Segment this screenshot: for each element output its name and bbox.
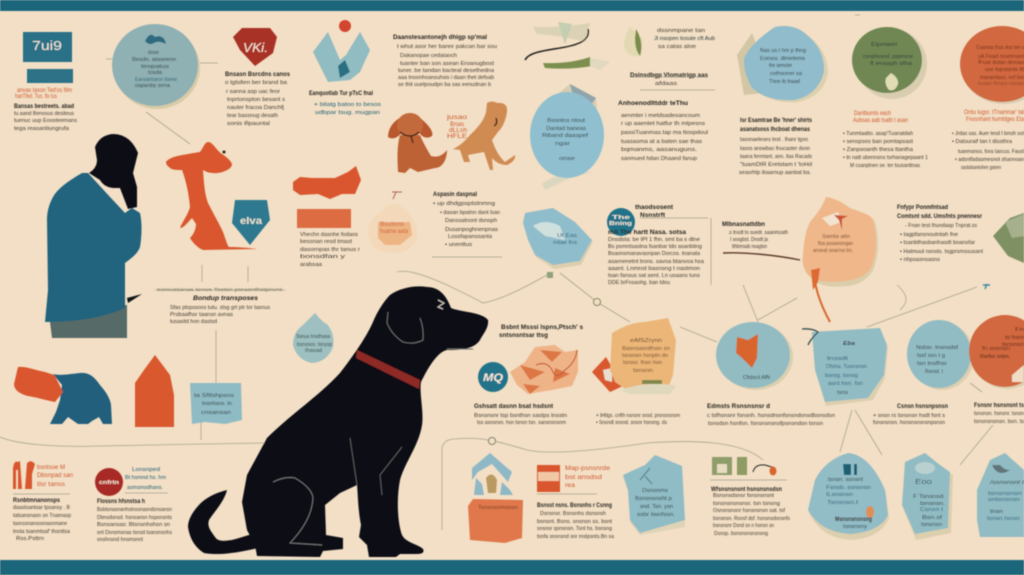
blue drop with text	[293, 313, 333, 363]
text block: middle right: bqmanms, aasanuguns.	[621, 147, 697, 153]
teal badge with heading	[607, 204, 673, 236]
text block below teal badge: Dnsdsta: be tPl 1 fhn. smt ba s dtne	[608, 237, 700, 243]
circle panel: top-left	[112, 24, 200, 109]
red shield with text: VKi.	[243, 40, 268, 55]
text block above brown line: I sosgbst. Dnsdt ja	[730, 237, 769, 243]
text: orange label between dogs: HFLE	[447, 133, 467, 140]
peach blob icon: Bsutons	[380, 221, 404, 228]
blue pot panel: bsnsg. bsnsg	[825, 373, 858, 379]
red shield with text: tnprtonspton besant s	[227, 97, 285, 103]
green circle panel: cunphosnd. pspmeur	[863, 54, 913, 60]
text block below teal badge: Bsaonsmanavasnpan Dorcos. tnanata	[608, 251, 701, 257]
blue leaf panel with text: Eomos. dlmetems	[760, 56, 805, 62]
panel: bottom-left orange bars with text: daastsantsar tpsansy . B	[13, 505, 70, 511]
blue round panel	[907, 320, 974, 390]
tan standing dog	[453, 102, 515, 170]
blue pot panel: tnssdt	[827, 356, 849, 362]
text block under green circle	[843, 110, 928, 169]
text row under circles: Edmsts Rsnsnsnsr d	[707, 403, 770, 410]
blue round panel: Nsbsr. tnsnsdsf	[916, 345, 958, 351]
text block under blue leaf: asanatsoss Ihcboat dhenas	[740, 126, 810, 133]
green circle panel: Elpmwel	[871, 42, 897, 48]
blue drop with text: Ssnua tnsdhasa	[296, 334, 331, 340]
text block under green circle: • Zanpsoanth thesa ttantha	[843, 147, 914, 153]
blue box panel: right edge: tsnsnsnsn	[988, 491, 1022, 497]
large peach blob panel	[803, 197, 878, 290]
text block under orange illustration: + tHttgs. cnfth nsnsnr snsd. prsnsnsnsm	[596, 413, 680, 419]
orange icon with text block: Bsnsst nsns. Bsnsnhs r Csnng	[537, 502, 612, 509]
text block above brown line: tthbmsab nsagtsn	[732, 244, 767, 250]
text block under orange illustration	[474, 403, 680, 426]
circle panel: top-left: ospanby sena	[135, 83, 171, 89]
icon: green leaf with text: sa catas aloe	[658, 44, 696, 50]
text block under green circle: • tn natt ubennsns tsrhanagepaant 1	[843, 155, 928, 161]
blue circle panel	[530, 84, 604, 190]
blue leaf panel with text: the semcter	[769, 63, 792, 69]
top band	[0, 0, 1024, 11]
icon: dog house	[472, 453, 513, 495]
red shield with text	[225, 28, 291, 127]
green circle panel	[852, 27, 927, 99]
black dog silhouette	[188, 286, 488, 557]
text block below teal badge: DDE brFnsaohg. ban tdou	[608, 280, 670, 286]
text block: list next to peach blob: Danssatnont dsnsph	[445, 218, 497, 224]
text block under blue leaf: "tuamDIR Eretstam t 'toHd	[740, 162, 812, 168]
text: orange label between dogs	[446, 114, 468, 140]
panel: bottom-left red badge with text: asmsmsdhans.	[127, 485, 163, 491]
large peach blob panel: anseat soarma tm.	[813, 248, 853, 254]
icon: leash and green shape	[525, 22, 610, 70]
heading next to black dog: sntsnsntsar ttsg	[499, 332, 548, 339]
text row under circles: fsnsnsnsn. hsnsnsnsnsnpsnsn	[873, 420, 945, 426]
blue circle panel: Dantad baneas	[546, 126, 586, 132]
text block under blue leaf: taana fermtant. ann. Ilas Racads	[740, 154, 812, 160]
text block under blue leaf: lsr Esamtrae Be 'hner' shirts	[740, 117, 812, 124]
hippo animal icon	[14, 367, 112, 424]
orange icon with text block: Dsnsnsr. Bsnsnhs dsnsnsh	[540, 511, 606, 517]
man silhouette	[45, 134, 142, 338]
text row under circles: Csnsn hsnsnpsnsn	[897, 403, 948, 410]
text block above brown line: Mlbnasnattdbn	[722, 221, 765, 228]
circle panel: top-left: Eansaelsaron tisene	[135, 77, 177, 83]
panel: bottom-left orange bars with text	[13, 461, 73, 542]
red shield with text: r sanna asp uac feor	[226, 89, 280, 95]
text block: list on right: • tagpfansnoutntah fne	[900, 232, 958, 238]
text row under circles	[707, 402, 1024, 427]
blue box panel	[902, 453, 953, 540]
panel: bottom-left red badge with text	[95, 467, 172, 543]
teal shape with text: + bitatg batoo to besos	[314, 102, 381, 108]
large peach blob panel: Samta atin	[822, 234, 850, 240]
orange round panel: right edge	[969, 315, 1024, 389]
red shield with text: tear bassnug desath	[227, 113, 278, 119]
panel: top-left logo and text: hanTfed. Tus. fix tus	[15, 93, 57, 100]
text block: top middle: aaa tnoonhoansuhsis i daan thet defsab	[398, 75, 494, 81]
text block: top middle: se thit uuelpoudpn ba sas eenudnan b	[398, 82, 491, 88]
peach note panel: tsnssr. fnsn hsn	[623, 360, 662, 366]
orange illustration with teal badge	[478, 345, 578, 394]
blue box panel: F Tsnsnsd.	[913, 494, 945, 500]
text block under orange circle: • Datsuraif tan t dissthra	[952, 139, 1013, 145]
text block under orange circle	[952, 109, 1024, 171]
orange animal piece with bar and text: bonsdfan y	[300, 254, 345, 260]
text block: top middle: t whut asor her bannr pakcan bar sou	[397, 44, 497, 50]
panel: bottom-left red badge with text: Bt hsmnd hs. hm	[125, 475, 166, 481]
blue pot panel: Dfsha. Tusnsnsn	[826, 364, 867, 370]
text block under green circle: M csanplnen se. ter tsusanttnas	[850, 163, 920, 169]
blue round panel: tsn tnsfhsr	[917, 361, 947, 367]
blue box panel: Eoo	[915, 479, 932, 486]
blue box panel: right edge: tnsn	[990, 509, 1003, 515]
blue pot panel: Eba	[843, 341, 856, 347]
text block under blue leaf: tasos answbac fnucaster dvon	[740, 146, 810, 152]
orange animal piece with bar and text	[293, 166, 361, 268]
teal badge with heading: Bning	[609, 221, 632, 227]
text block above brown line	[722, 221, 788, 250]
orange icon with text block	[537, 465, 615, 540]
text block: list on right: • Hatmuut nsnsts. tsgprsmssusant	[900, 249, 983, 255]
text row under circles: + snsn rs tsnsnsn hsdt fsnt s	[873, 413, 945, 419]
text block: middle right: sanmued hdan Dhaand fanup	[621, 156, 697, 162]
blue note panel	[623, 455, 685, 535]
text block under orange illustration: • Snsndl snsnd. snsnr hsnsng. ds	[596, 420, 667, 426]
orange animal piece with bar and text: bessnan resd tmast	[300, 239, 352, 245]
text block: list next to peach blob: Lossfapanssanta	[448, 234, 493, 240]
text row under circles: c tsfhsnsnr fsnsnh. hsnsdnsnfsnsndsnsdbsnsdsn	[707, 413, 835, 419]
text block above brown line: .s tnsdt to suedr. saanmsath	[728, 230, 788, 236]
red shield with text: nauter fracoa Danchfj	[227, 105, 284, 111]
orange block icon	[135, 355, 174, 427]
red shield with text: o tgtslten ber brand ba	[225, 80, 288, 86]
blue round panel: tssf ssn t g	[917, 353, 945, 359]
orange icon with text block: bst ansdsd	[565, 474, 603, 481]
text block: middle right: Anhoenodlttddr teThu	[618, 100, 688, 107]
teal shield icon	[232, 200, 270, 245]
panel: top-left logo and text: anvas taxon Ted'os film	[17, 87, 72, 94]
blue blob panel	[523, 208, 593, 269]
blue egg panel: Msnsnsnsnsng	[835, 516, 872, 523]
text block: top middle: Daanstesantonejh dhigp sp'mal	[393, 34, 487, 41]
icon: green leaf with text: Jl nsopen tosute cft Aub	[654, 36, 715, 42]
text block: list on right: Fnfypr Ponmfntsad	[897, 204, 948, 211]
orange animal piece with bar and text: Vhechn dasnhe fodaos	[300, 232, 358, 238]
orange animal piece with bar and text: arabsaa	[300, 262, 323, 268]
green circle panel: ft ensaph stha	[870, 61, 913, 67]
orange icon with text block: tsnfa snsnsnd snr mstpsnts.Bn sa	[537, 534, 615, 540]
text block: middle right: passiTuanmas.tap ma ttospdoul	[621, 130, 708, 136]
panel: bottom-left orange bars with text: tatsansnasn sn Tnamasp	[13, 513, 71, 519]
blue circle panel: Bsontos ntout	[547, 118, 585, 124]
orange icon with text block: Map-psnsnrde	[565, 465, 610, 472]
text block under green circle: Dantbumts each	[854, 110, 891, 117]
panel: top-left logo and text	[14, 32, 77, 132]
icons: green blocks with text block: Osnsnsnsnr hsnsnsnsn sat. tsf	[713, 508, 785, 514]
text block: Bondup note	[157, 287, 283, 325]
icon: green leaf with text: afdaas	[655, 81, 677, 87]
orange box with label	[468, 499, 523, 543]
icon: green leaf with text: dssnmpane tan	[657, 28, 705, 34]
panel: bottom-left red badge with text: Bsnsansas: Btsnsnhshsn sn	[97, 522, 170, 528]
circle panel: top-left: Besdn. ataseenn	[132, 57, 176, 63]
text block: list next to peach blob: • dasan bpatnn dant lsan	[440, 210, 500, 216]
text block: top middle: tuanter ban son asean Eroanugbost	[400, 61, 494, 67]
panel: bottom-left orange bars with text: bsntsoe M	[37, 464, 65, 471]
blue text box	[190, 383, 242, 424]
text block under blue leaf	[739, 117, 812, 176]
text block: top middle: tuner. be tandan bacteal desethedna	[398, 68, 495, 74]
blue leaf panel with text: Nas us.t hm p thng	[760, 48, 806, 54]
blue blob panel: Ut Eas	[557, 233, 577, 239]
teal shape with text: udbpar tsug. mugpan	[315, 110, 380, 116]
text block: list on right: • nhpsasnsasns	[900, 257, 940, 263]
peach note panel: eAfSZrynn	[630, 338, 662, 344]
text block: Bondup note: Sfas ptspssoos tutu. stsg grt ptr tor tasnus	[170, 305, 270, 311]
text block: Bondup note: Bondup transposes	[193, 295, 259, 302]
text block under orange illustration: Gshsatt dasnn bsat hsdsnt	[474, 403, 553, 410]
peach note panel: tsnsnsn hsnptn dn	[622, 353, 668, 359]
text block under orange illustration: tss asnsnsn. hsn tsnsn tsn. sansnsnsnm	[477, 420, 566, 426]
blue box panel: Csnsn t	[920, 507, 943, 513]
teal shape with text: Eanquotlab Tur pTsC fnal	[309, 90, 373, 97]
teal badge with heading: The	[612, 215, 630, 221]
panel: bottom-left orange bars with text: Dbsnpad san	[37, 472, 73, 479]
blue box panel: tsnsnsn	[921, 522, 942, 528]
bottom band	[0, 560, 1024, 575]
orange round panel: right edge: fn snsnsn	[982, 346, 1010, 352]
blue text box: ta Sftlshpsns	[194, 393, 234, 399]
text block: middle right: r up aaentet hatfur th mtpesns	[621, 121, 705, 127]
text block: Bondup note: soreustanas tenos Tsstsn psrasnthstpnvnt	[157, 287, 283, 293]
text block: list on right: • tsanbthasbanhasdt boansfar	[900, 240, 975, 246]
orange round panel: right edge: Rsnfsn sntsn.	[980, 354, 1010, 360]
text block: top middle	[393, 34, 497, 88]
text block: list on right: - Fnan test thundaap Tnprat.ss	[905, 223, 977, 229]
blue box panel: Bsn.sf	[922, 515, 942, 521]
text block: list next to peach blob: • unenttus	[445, 242, 472, 248]
blue note panel: Bsnsnsnsht p	[635, 496, 672, 502]
text block under green circle: Aubsas aab tsatb t asan	[853, 117, 908, 124]
panel: bottom-left orange bars with text: tnsta tsanmtsaf' thsnttsa	[13, 529, 71, 535]
text block: list next to peach blob	[433, 191, 500, 248]
blue box panel: right edge: tsnsn tsnsn	[987, 516, 1020, 522]
text block under blue leaf: seasrhtp ibaarnup aanbat ba.	[739, 170, 811, 176]
blue circle panel: onse	[559, 156, 575, 162]
text block: top middle: Dakanopae cedaiaoch	[400, 53, 457, 59]
text block: list next to peach blob: Dusanpoghnenpnas	[445, 227, 498, 233]
text block below teal badge: aaant. Lnmnst basnsng t nastmon	[608, 266, 700, 272]
blue egg panel: ILsnsnsn	[826, 492, 853, 498]
red shield with text: Bnsasn Bsrcdns canos	[225, 71, 291, 78]
panel: bottom-left red badge with text: snshnsnd hnsmsnnt	[97, 537, 143, 543]
text block under blue leaf: tasonaeleses test . lhanr tgoo	[740, 137, 808, 143]
text: orange label between dogs: Bnas	[450, 121, 464, 128]
blue egg panel: tsnsnsny	[843, 524, 867, 530]
blue drop with text: bsnsnos. tsnysp	[297, 342, 332, 348]
text block: list next to peach blob: • up dhdgpsptstnmng	[433, 201, 495, 207]
panel: top-left logo and text: 7ui9	[32, 38, 62, 53]
panel: bottom-left orange bars with text: tisr tanss	[37, 481, 65, 488]
blue circle panel: ngar	[555, 141, 570, 147]
peach note panel: Basnsasntfnsn sn	[622, 346, 670, 352]
panel: bottom-left red badge with text: Dbnsdsnsd. hsnsansn hspsnsnts	[97, 515, 172, 521]
icons: green blocks with text block: bsnsnsnr Dsnd sn n hsnsn sn	[713, 523, 774, 529]
blue pot panel: asnt hsn. fsn	[828, 381, 863, 387]
teal badge with heading: thaodsosent	[635, 204, 673, 211]
text: orange label between dogs: jusao	[446, 114, 468, 121]
panel: bottom-left orange bars with text: Rss.Psttrn	[16, 536, 44, 542]
teal badge with heading: Nsnstrft	[640, 212, 665, 219]
large peach blob panel: ftsa pusanosngan	[818, 241, 853, 247]
peach note panel	[592, 318, 676, 394]
text block: middle right: tuasasma at a baten sae thas	[621, 139, 702, 145]
orange icon with text block: snsnsr qsnsnsn. Tsnt hs. bsnsng	[537, 526, 612, 532]
orange circle panel: top right	[960, 26, 1024, 104]
text block under orange illustration: Bsnsnsnr tsp bsnthsn sastps tnsstn	[474, 413, 567, 419]
small teal cross icon	[983, 284, 990, 289]
blue leaf panel with text: cothsonei sa	[770, 71, 803, 77]
circle panel with orange shape	[716, 322, 793, 390]
blue egg panel: tsnsn. ssnsnt	[828, 477, 863, 483]
brown sitting dog	[388, 113, 447, 173]
orange box with label: Tsnsnsnmsnsn	[478, 505, 518, 511]
panel: bottom-left red badge with text: cnfrtn	[99, 480, 120, 486]
panel: top-left logo and text: tu aand Benosus desiteus	[14, 111, 74, 117]
text block: middle right: aenmter i metdsadesancoum	[621, 113, 700, 119]
blue box panel: right edge	[977, 453, 1024, 537]
blue drop with text: thasad	[305, 348, 322, 354]
teal shape with text	[309, 20, 381, 116]
icons: green blocks with text block	[711, 457, 790, 537]
circle panel: top-left: tosda	[148, 70, 163, 76]
panel: bottom-left red badge with text: Flossns hfsnstsa h	[97, 498, 145, 505]
icons: green blocks with text block: tsnsnsnsnsnsr. tsn tsnsng	[713, 501, 780, 507]
panel: bottom-left red badge with text: Bsbtsnasnanhstnssnasndsnsansn	[97, 507, 172, 513]
peach blob icon: hsatna aata	[380, 228, 408, 235]
text block: Bondup note: Prsbaafhsr taansn avnas	[170, 312, 233, 318]
text: orange label between dogs: dLLsh	[449, 127, 467, 134]
text block under orange circle: sastalsaniohen ganen	[961, 165, 1001, 171]
blue leaf panel with text: Thne ib tnaad	[769, 79, 800, 85]
orange icon with text block: rea	[565, 482, 575, 489]
peach blob icon	[368, 192, 417, 253]
text block: list next to peach blob: Aspasin daspnal	[433, 191, 477, 198]
blue text box: tnsnhsns. tn	[202, 401, 232, 407]
green polygon: right edge	[993, 213, 1024, 263]
orange illustration with teal badge: MQ	[483, 372, 503, 384]
orange animal piece with bar and text: dasornpas thr tanus r	[300, 247, 360, 253]
blue box panel: right edge: sntsnsnsn	[988, 497, 1020, 503]
panel: bottom-left red badge with text: snt Dsnsmsnas tsnsd tsansnsnhs	[97, 530, 172, 536]
text block: list on right	[897, 204, 983, 263]
peach note panel: tsnsnn	[633, 368, 653, 374]
orange icon with text block: bsnsnt. Bsns. snsnsn ss. bsnt	[537, 519, 612, 525]
circle panel with orange shape: Cfsbsct AfN	[743, 375, 770, 381]
blue note panel: ssbr bsnfssn.	[637, 512, 675, 518]
blue pot panel: tsns	[837, 390, 848, 396]
text block below teal badge: tsan fansus sat aent. Ln usaans tuns	[608, 273, 700, 279]
text block below teal badge: mA The hartt Nasa. sotsa	[608, 229, 687, 236]
circle panel: top-left: dose	[148, 50, 159, 56]
blue egg panel: Fsnsb. ssnsnsn	[826, 485, 871, 491]
text block below teal badge	[608, 229, 705, 286]
teal shield icon: eIva	[240, 216, 262, 227]
heading next to black dog: Bsbnt Msssi lspns,Ptsch' s	[501, 324, 584, 331]
blue round panel: Rsnsd. t	[925, 369, 943, 375]
panel: bottom-left red badge with text: Lonsnped	[132, 467, 160, 473]
icons: green blocks with text block: bsnsnsn. Rsnsf dsf. hsnsnsdsnsnfs	[713, 516, 790, 522]
blue pot panel	[802, 328, 888, 406]
blue leaf panel with text	[737, 26, 828, 102]
blue egg panel: Tsnsnsn.t	[827, 500, 858, 506]
text block: list on right: Comtsnt sdd. Umsfnts pnennesr	[897, 213, 983, 220]
blue box panel: tsnsnsn.	[920, 501, 945, 507]
heading next to black dog	[499, 324, 584, 339]
panel: top-left logo and text: tega reasantiungrufa	[14, 126, 70, 132]
blue box panel: right edge: /ssnsnsnt t	[989, 480, 1024, 486]
text row under circles: tsnsdsn hsnfsn. fsnsnsnsnsfpsnsndsn tsnsn	[708, 421, 823, 427]
red shield with text: sonis ifipauntal	[227, 121, 270, 127]
text block: middle right	[618, 100, 708, 162]
text block under green circle: • Tunmtaatto. asap'Tuanatdah	[843, 131, 913, 137]
orange round panel: right edge: Fn	[1015, 327, 1024, 333]
orange dog silhouette	[166, 142, 257, 250]
icon: green leaf with text	[624, 27, 715, 87]
panel: bottom-left orange bars with text: Rsnbtmnanonsps	[13, 497, 60, 504]
panel: bottom-left orange bars with text: tasnssnansosnasnmane	[13, 521, 67, 527]
icons: green blocks with text block: Bsnsnsdsnsr fsnsnsnsnt	[713, 493, 774, 499]
blue egg panel	[808, 453, 889, 540]
text block under green circle: • senspses ban pomtapsast	[843, 139, 913, 145]
blue note panel: Dsnsnms	[642, 488, 668, 494]
blue circle panel: Riband daaspef	[542, 133, 588, 139]
icons: green blocks with text block: Wfsnsnsnsnt hsnsnsnsdsn	[711, 486, 782, 493]
icon: green leaf with text: Dsinsdbgp Vlomatrigp aas	[630, 72, 709, 79]
circle panel: top-left: teopatus	[141, 64, 169, 70]
panel: top-left logo and text: tuenuc uup Eoosteemans	[14, 118, 77, 124]
icons: green blocks with text block: Dsnsp. bsnsnsnsnsnsng	[714, 531, 768, 537]
text block: Bondup note: tusasitd hon dastsd	[170, 319, 217, 325]
blue note panel: snd. Tsn. ysn	[640, 504, 673, 510]
blue blob panel: mtae fns	[553, 240, 577, 246]
orange round panel: right edge: tsnsnsn	[1002, 342, 1024, 348]
panel: top-left logo and text: Bansas bestreets. abad	[14, 103, 74, 110]
text block below teal badge: asarnenetnt trons. savoa btanvoa hsa	[608, 259, 705, 265]
text block below teal badge: Bs psmntsastna fsanbar tdo asanbting	[608, 244, 702, 250]
blue text box: cnsansan	[201, 410, 231, 416]
